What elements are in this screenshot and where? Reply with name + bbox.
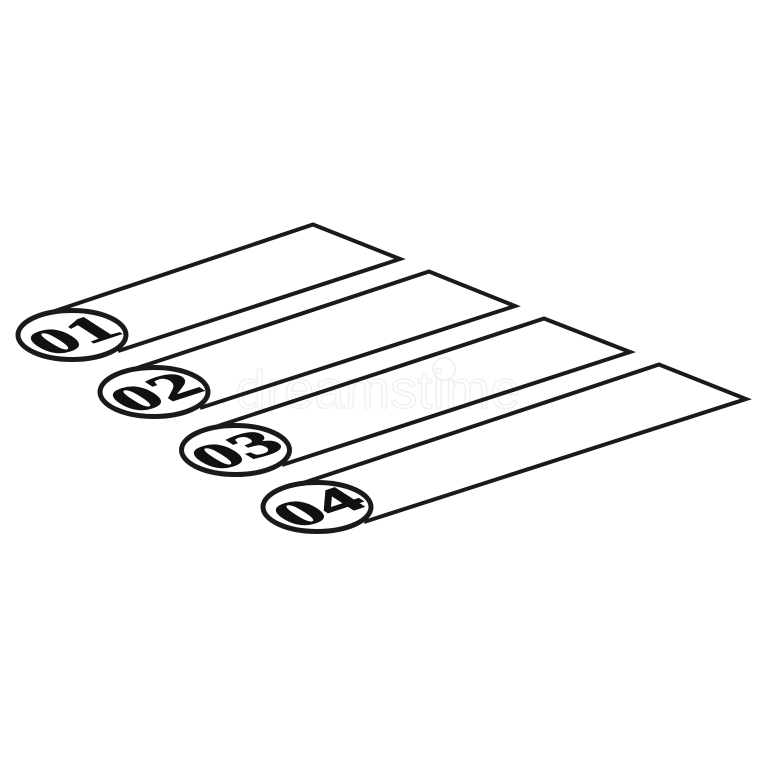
item 03 bbox=[175, 318, 630, 478]
bar 04 bbox=[300, 364, 746, 522]
bar 02 bbox=[137, 272, 515, 408]
circle 02 bbox=[100, 368, 208, 416]
number 03: 03 bbox=[175, 423, 298, 478]
item 04 bbox=[257, 364, 746, 535]
item 01 bbox=[12, 224, 400, 363]
bar 01 bbox=[55, 224, 400, 351]
number 02: 02 bbox=[94, 365, 217, 420]
circle 01 bbox=[18, 310, 126, 360]
number 01: 01 bbox=[12, 308, 135, 363]
watermark: dreamstime bbox=[236, 360, 520, 420]
bar 03 bbox=[218, 318, 630, 465]
circle 03 bbox=[182, 426, 290, 474]
item 02 bbox=[94, 272, 515, 420]
number 04: 04 bbox=[257, 480, 380, 535]
circle 04 bbox=[263, 482, 371, 532]
